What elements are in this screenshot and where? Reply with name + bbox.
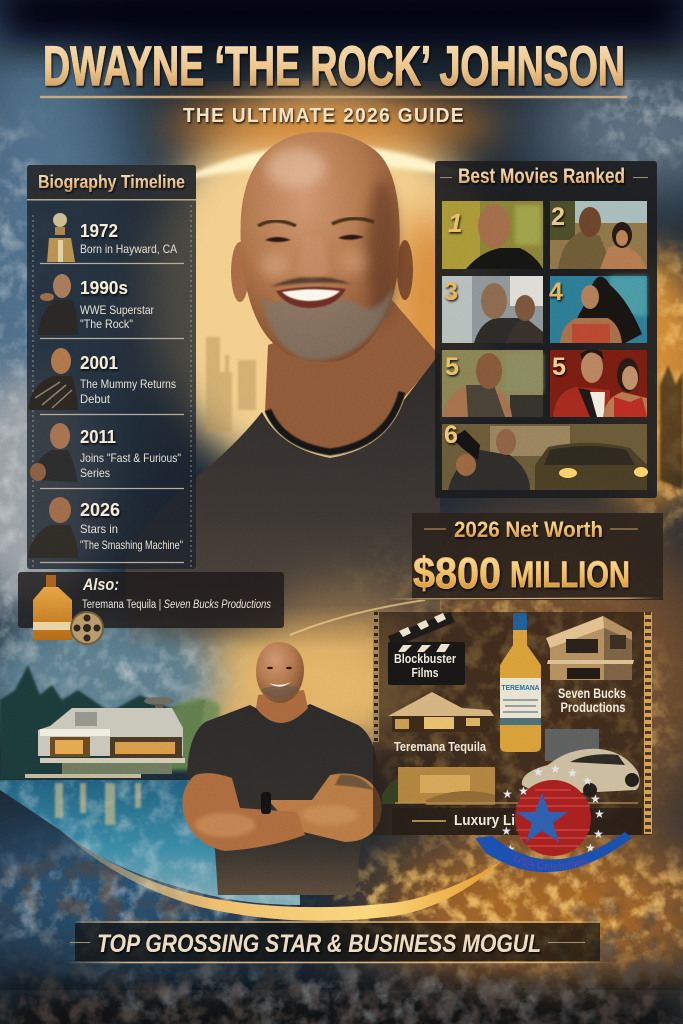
timeline 1990s	[38, 274, 154, 335]
right arm	[268, 774, 382, 842]
timeline 2001: 2001	[80, 353, 118, 373]
timeline 1990s: 1990s	[80, 278, 128, 298]
net worth value: MILLION	[510, 554, 630, 595]
smile	[276, 287, 346, 308]
timeline 2011	[30, 423, 181, 482]
panel heading: Best Movies Ranked	[458, 165, 625, 188]
badge small stars: ★	[590, 792, 601, 806]
arc near net worth	[290, 600, 425, 635]
icon: trophy bottle	[47, 213, 75, 262]
cheek highlights	[261, 253, 289, 277]
beard stubble	[262, 288, 394, 360]
timeline 2011: Series	[80, 466, 110, 480]
badge small stars: ★	[585, 841, 596, 855]
clapperboard: Films	[412, 665, 438, 680]
movie 5 action	[442, 350, 543, 417]
tequila bottle	[500, 613, 541, 752]
city skyline	[206, 337, 256, 432]
luxury caption bar	[392, 803, 642, 835]
movie 4: 4	[549, 278, 563, 306]
movie 5 red notice	[550, 349, 647, 417]
net worth value	[413, 549, 630, 598]
sun arc behind portrait	[175, 144, 480, 182]
badge small stars: ★	[505, 842, 516, 856]
timeline 2011: Joins "Fast & Furious"	[80, 451, 181, 465]
timeline 1990s: "The Rock"	[80, 317, 133, 331]
tower behind mansion	[144, 697, 174, 722]
small portrait arms crossed	[182, 642, 382, 895]
timeline 2026: 2026	[80, 500, 120, 520]
footer banner: TOP GROSSING STAR & BUSINESS MOGUL	[97, 930, 541, 958]
timeline 1972: 1972	[80, 221, 118, 241]
movie 2	[550, 201, 647, 269]
bottom gold arc	[60, 830, 503, 921]
right cheek shadow	[366, 180, 398, 320]
small head	[256, 642, 304, 703]
badge small stars: ★	[533, 765, 544, 779]
movie 2: 2	[551, 203, 565, 231]
business empire panel	[373, 612, 652, 835]
movie 1: 1	[448, 208, 462, 238]
eyebrows	[258, 221, 296, 226]
ears	[231, 242, 249, 302]
trees right edge	[660, 365, 683, 490]
icon: wrestler	[38, 274, 78, 335]
watch	[261, 792, 271, 814]
shirt	[125, 353, 440, 650]
icon: whiskey bottle	[33, 575, 72, 640]
mansion	[25, 708, 185, 778]
timeline 1972	[47, 213, 177, 262]
movie 3	[442, 276, 543, 343]
timeline 2011: 2011	[80, 427, 116, 447]
movie 3: 3	[444, 278, 458, 306]
timeline 1990s: WWE Superstar	[80, 303, 154, 317]
panel heading	[27, 165, 196, 200]
badge ball	[515, 780, 591, 856]
neck	[256, 690, 308, 723]
icon: smashing machine	[28, 497, 78, 558]
subtitle: THE ULTIMATE 2026 GUIDE	[183, 105, 465, 127]
movie 6	[442, 421, 648, 490]
timeline 2001: The Mummy Returns	[80, 377, 176, 391]
lake	[0, 780, 300, 905]
timeline 2001	[28, 348, 176, 410]
net worth panel	[388, 513, 663, 600]
timeline 2001: Debut	[80, 392, 111, 406]
badge small stars: ★	[501, 824, 512, 838]
movie 5 red notice: 5	[552, 353, 566, 381]
movies panel	[435, 161, 657, 498]
left arm	[182, 773, 305, 851]
seven bucks label	[558, 686, 626, 715]
timeline 2026: "The Smashing Machine"	[80, 538, 183, 552]
net worth value: $800	[413, 549, 501, 598]
neck	[265, 300, 440, 453]
net worth panel: 2026 Net Worth	[454, 517, 603, 542]
also panel	[18, 572, 284, 644]
tequila bottle: TEREMANA	[502, 683, 540, 692]
nose	[296, 236, 330, 278]
movie 4	[549, 276, 647, 343]
timeline 2026	[28, 497, 183, 558]
movie 1	[442, 201, 543, 269]
badge small stars: ★	[567, 766, 578, 780]
moustache	[270, 277, 352, 287]
grey storage building	[545, 729, 599, 761]
badge small stars: ★	[582, 774, 593, 788]
icon: mummy returns	[28, 348, 78, 410]
icon: film reel	[71, 612, 103, 644]
ribbon	[475, 832, 632, 872]
movie 5 action: 5	[445, 353, 459, 381]
badge small stars: ★	[518, 784, 529, 798]
torso	[187, 704, 378, 895]
hotel	[382, 767, 495, 805]
teeth	[282, 289, 340, 301]
badge small stars	[501, 762, 605, 856]
building	[546, 616, 634, 680]
car	[522, 749, 640, 797]
film strip	[373, 612, 652, 834]
head	[241, 132, 400, 362]
also panel: Also:	[82, 575, 119, 594]
clapperboard	[388, 612, 465, 685]
biography panel	[27, 165, 196, 569]
also panel: Teremana Tequila | Seven Bucks Productions	[82, 599, 271, 611]
movie 6: 6	[444, 421, 458, 449]
badge small stars: ★	[594, 807, 605, 821]
teremana label: Teremana Tequila	[394, 739, 487, 754]
watermark badge USA Celebrities	[475, 762, 632, 872]
seven bucks label: Productions	[560, 700, 626, 715]
seven bucks label: Seven Bucks	[558, 686, 626, 701]
badge small stars: ★	[550, 762, 561, 776]
forest behind mansion	[0, 665, 205, 780]
panel heading: Biography Timeline	[38, 172, 185, 192]
luxury caption bar: Luxury Lifestyle	[454, 812, 558, 829]
house	[388, 692, 494, 732]
headline	[40, 26, 640, 127]
timeline 1972: Born in Hayward, CA	[80, 242, 177, 256]
icon: fast and furious	[30, 423, 77, 482]
head highlight	[266, 148, 326, 188]
clapperboard: Blockbuster	[394, 651, 456, 666]
eyes	[265, 237, 291, 242]
watermark badge USA Celebrities: USA Celebrities	[514, 854, 588, 870]
timeline 2026: Stars in	[80, 522, 118, 536]
badge star	[516, 793, 568, 842]
badge small stars: ★	[593, 827, 604, 841]
main portrait	[125, 132, 440, 650]
footer banner	[62, 922, 615, 962]
badge small stars: ★	[502, 787, 513, 801]
